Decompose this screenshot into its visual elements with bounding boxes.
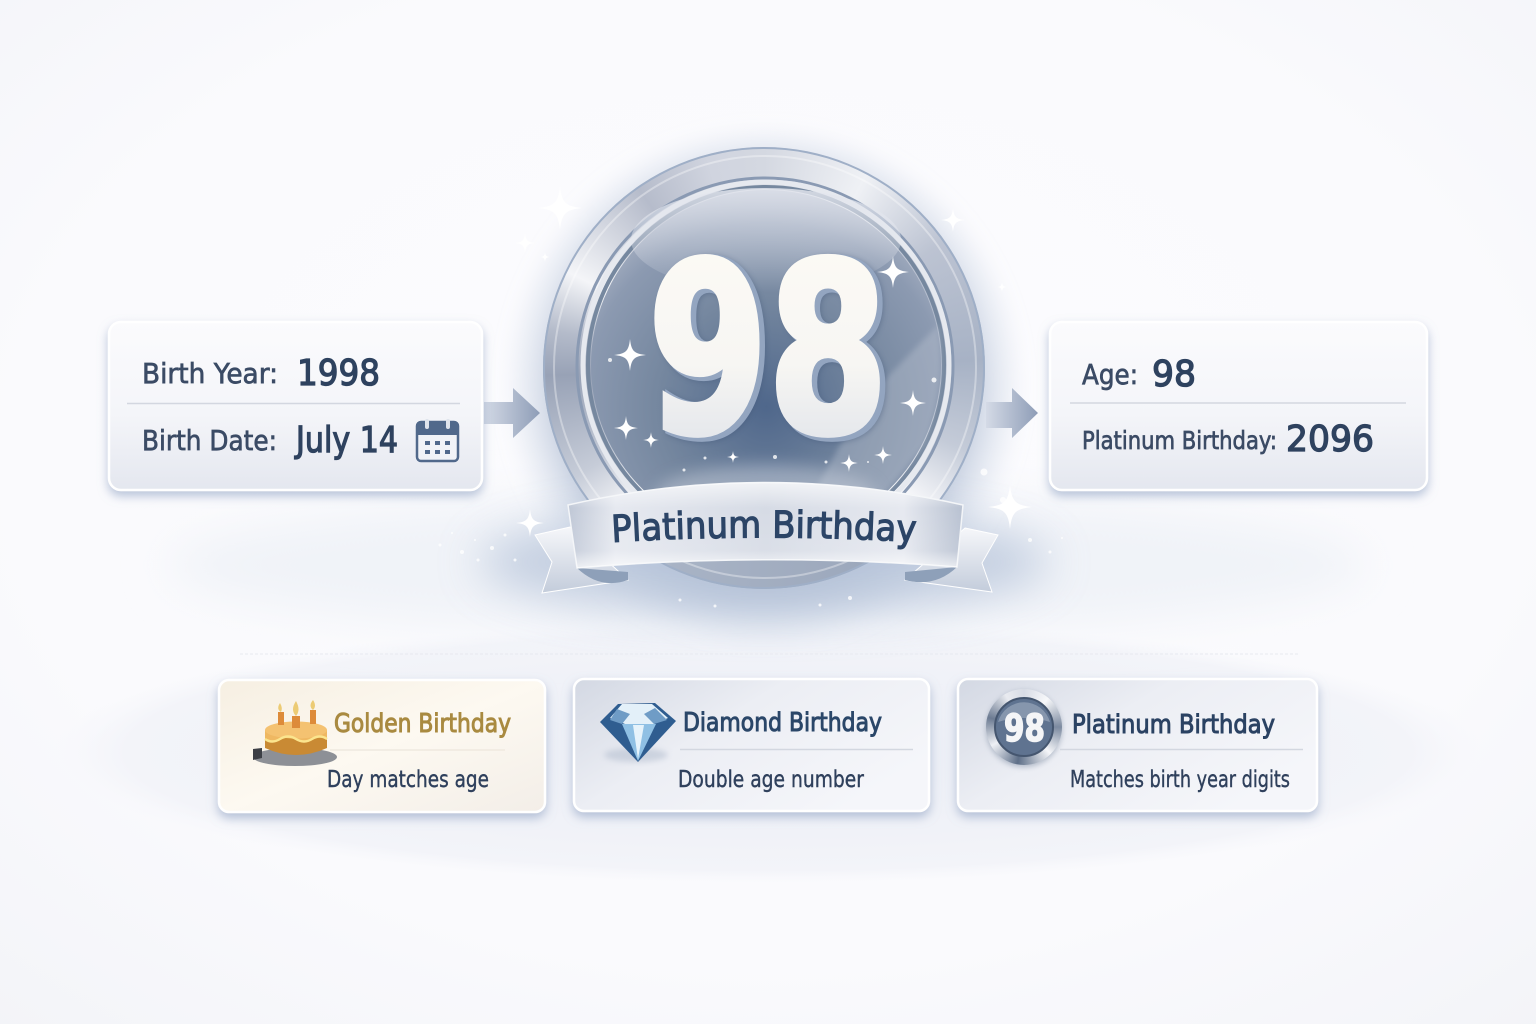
ribbon title: Platinum Birthday bbox=[613, 509, 917, 550]
panel: result bbox=[1050, 322, 1427, 490]
card: diamond birthday bbox=[574, 679, 929, 811]
label: age: Age: bbox=[1082, 358, 1138, 391]
large number 98: 98 bbox=[653, 218, 893, 490]
arrow: medal to result bbox=[986, 388, 1038, 438]
sparkles bbox=[438, 186, 1063, 608]
card: golden birthday bbox=[219, 680, 545, 812]
value: 2096: 2096 bbox=[1286, 419, 1374, 460]
card: platinum birthday bbox=[958, 679, 1317, 811]
label: birth date: Birth Date: bbox=[142, 424, 277, 457]
ribbon band bbox=[568, 482, 963, 568]
arrow: birth data to medal bbox=[484, 388, 540, 438]
value: 98: 98 bbox=[1152, 354, 1196, 395]
heading: diamond birthday: Diamond Birthday bbox=[683, 708, 882, 738]
heading: golden birthday: Golden Birthday bbox=[334, 709, 511, 739]
description: day matches age: Day matches age bbox=[327, 767, 489, 793]
medal face bbox=[591, 190, 941, 540]
value: 1998: 1998 bbox=[297, 353, 380, 394]
icon: calendar bbox=[417, 419, 458, 461]
value: July 14: July 14 bbox=[294, 420, 398, 461]
ribbon left tail bbox=[535, 527, 628, 593]
icon: small platinum medal bbox=[986, 689, 1062, 767]
label: birth year: Birth Year: bbox=[142, 357, 278, 390]
central medal bbox=[438, 147, 1063, 608]
heading: platinum birthday: Platinum Birthday bbox=[1072, 710, 1275, 740]
label: platinum birthday: Platinum Birthday: bbox=[1082, 426, 1277, 455]
icon: diamond bbox=[600, 703, 676, 762]
icon: cake bbox=[253, 700, 337, 766]
panel: birth input bbox=[109, 322, 482, 490]
description: matches birth year digits: Matches birth year digits bbox=[1070, 767, 1290, 793]
ribbon bbox=[534, 482, 999, 594]
ribbon right tail bbox=[905, 528, 998, 592]
large number 98: 98 bbox=[648, 215, 888, 487]
icon: small platinum medal: 98 bbox=[1004, 707, 1045, 750]
medal ring bbox=[540, 147, 988, 589]
large number 98: 98 bbox=[652, 217, 892, 489]
description: double age number: Double age number bbox=[678, 767, 864, 793]
medal glow bbox=[479, 123, 1049, 647]
